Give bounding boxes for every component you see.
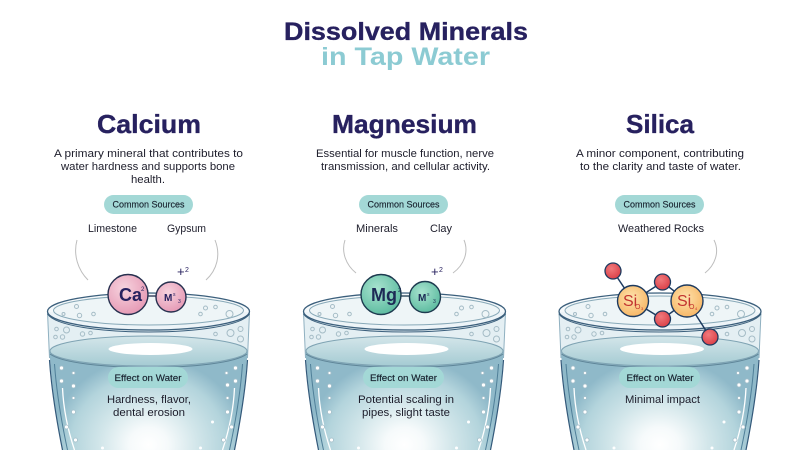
badge: common sources xyxy=(615,195,704,214)
molecule: magnesium: + xyxy=(431,264,439,279)
molecule: silica xyxy=(605,263,718,345)
title xyxy=(284,18,528,71)
effect text xyxy=(107,394,191,419)
badge: common sources: Common Sources xyxy=(368,200,440,210)
molecule: calcium: 2 xyxy=(141,287,145,293)
description: magnesium: Essential for muscle function, nerve xyxy=(316,148,494,160)
description: calcium: water hardness and supports bone xyxy=(60,161,235,173)
molecule: silica: O xyxy=(635,304,641,311)
badge: common sources: Common Sources xyxy=(624,200,696,210)
badge: effect on water xyxy=(108,367,188,388)
badge: effect on water: Effect on Water xyxy=(114,373,182,384)
panel: calcium xyxy=(48,109,250,450)
description: magnesium xyxy=(316,148,494,173)
source labels xyxy=(88,223,206,235)
description: silica xyxy=(576,148,744,173)
molecule: calcium: 2 xyxy=(185,267,189,274)
effect text: dental erosion xyxy=(113,407,185,419)
panel: magnesium xyxy=(304,109,506,450)
molecule: calcium: 3 xyxy=(178,299,181,305)
molecule: calcium: + xyxy=(177,264,185,279)
description: silica: to the clarity and taste of water. xyxy=(580,161,741,173)
molecule: silica: Si xyxy=(677,293,691,310)
badge: effect on water xyxy=(619,367,700,388)
title: in Tap Water xyxy=(321,43,490,71)
effect text: Minimal impact xyxy=(625,394,700,406)
molecule: magnesium: Mg xyxy=(371,285,397,305)
heading: magnesium: Magnesium xyxy=(332,109,477,139)
description: calcium xyxy=(54,148,243,186)
source labels: Minerals xyxy=(356,223,398,235)
source arc xyxy=(705,240,717,273)
title: Dissolved Minerals xyxy=(284,18,528,46)
source labels: Clay xyxy=(430,223,452,235)
source arcs xyxy=(344,240,466,273)
badge: common sources: Common Sources xyxy=(112,200,185,210)
source label: Weathered Rocks xyxy=(618,223,704,235)
molecule: silica: 4 xyxy=(695,306,698,311)
badge: effect on water: Effect on Water xyxy=(370,373,437,384)
heading: calcium: Calcium xyxy=(97,109,201,139)
molecule: magnesium: M xyxy=(418,293,426,304)
molecule: silica: Si xyxy=(623,293,637,310)
badge: common sources xyxy=(359,195,448,214)
source labels xyxy=(356,223,452,235)
effect text: Hardness, flavor, xyxy=(107,394,191,406)
effect text: pipes, slight taste xyxy=(362,407,450,419)
description: magnesium: transmission, and cellular activity. xyxy=(321,161,490,173)
molecule: silica: 3 xyxy=(641,306,644,311)
molecule: calcium: M xyxy=(164,293,172,304)
badge: effect on water xyxy=(363,367,444,388)
glass of water xyxy=(48,293,250,450)
source labels: Gypsum xyxy=(167,223,206,235)
molecule: calcium xyxy=(108,264,189,314)
molecule: magnesium: 3 xyxy=(433,299,436,305)
molecule: silica: O xyxy=(689,304,695,311)
glass of water xyxy=(559,293,761,450)
molecule: calcium: s xyxy=(173,292,176,298)
source arcs xyxy=(76,240,218,280)
molecule: magnesium: 2 xyxy=(439,267,443,274)
heading: silica: Silica xyxy=(626,109,695,139)
molecule: calcium: Ca xyxy=(119,285,143,305)
glass of water xyxy=(304,293,506,450)
description: calcium: health. xyxy=(131,174,165,186)
panel: silica xyxy=(559,109,761,450)
molecule: magnesium: s xyxy=(427,292,430,298)
effect text: Potential scaling in xyxy=(358,394,454,406)
description: calcium: A primary mineral that contributes to xyxy=(54,148,243,160)
description: silica: A minor component, contributing xyxy=(576,148,744,160)
badge: common sources xyxy=(104,195,193,214)
molecule: magnesium: 2 xyxy=(398,288,402,294)
molecule: magnesium xyxy=(361,264,443,314)
effect text xyxy=(358,394,454,419)
source labels: Limestone xyxy=(88,223,137,235)
badge: effect on water: Effect on Water xyxy=(626,373,694,384)
